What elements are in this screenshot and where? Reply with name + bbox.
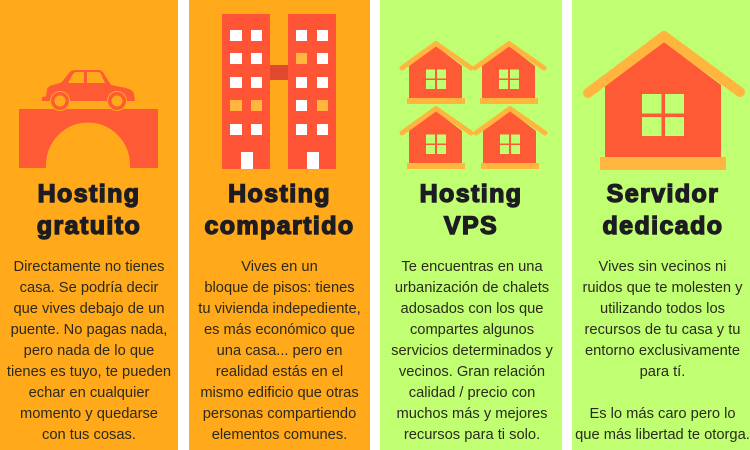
text: hosting VPS description: servicios determinados y	[391, 343, 553, 359]
text: hosting VPS description: recursos para ti solo.	[404, 427, 540, 443]
text: hosting gratuito description: echar en cualquier	[29, 385, 149, 401]
text: servidor dedicado description: recursos de tu casa y tu	[585, 322, 740, 338]
text: hosting compartido description: tu vivienda indepediente,	[198, 301, 361, 317]
text: hosting VPS description: vecinos. Gran relación	[399, 364, 545, 380]
text: hosting gratuito description: tienes es tuyo, te pueden	[7, 364, 171, 380]
icon: two apartment towers	[222, 14, 336, 169]
text: hosting compartido description: es más económico que	[204, 322, 355, 338]
text: servidor dedicado description: para tí.	[640, 364, 685, 380]
text: servidor dedicado description: utilizando todos los	[600, 301, 725, 317]
text: hosting compartido description	[198, 259, 361, 443]
text: hosting VPS description: calidad / precio con	[409, 385, 535, 401]
text: hosting VPS description: Te encuentras en una	[401, 259, 543, 275]
text: hosting compartido description: Vives en un	[241, 259, 318, 275]
heading: servidor dedicado: dedicado	[603, 212, 723, 240]
heading: hosting gratuito: Hosting	[38, 180, 140, 208]
heading: servidor dedicado: Servidor	[607, 180, 719, 208]
icon: four terraced houses	[400, 41, 548, 169]
text: hosting VPS description: compartes algunos	[410, 322, 534, 338]
text: servidor dedicado description: entorno exclusivamente	[585, 343, 740, 359]
heading: hosting VPS: VPS	[444, 212, 498, 240]
panel: servidor dedicado	[572, 0, 750, 450]
panel: hosting VPS	[380, 0, 562, 450]
text: hosting compartido description: personas compartiendo	[203, 406, 356, 422]
heading: hosting gratuito: gratuito	[37, 212, 141, 240]
text: hosting gratuito description: pero nada de lo que	[24, 343, 154, 359]
text: hosting VPS description: muchos más y mejores	[396, 406, 548, 422]
text: hosting gratuito description: que vives debajo de un	[13, 301, 165, 317]
text: hosting compartido description: mismo edificio que otras	[200, 385, 359, 401]
text: hosting gratuito description	[7, 259, 171, 443]
heading: hosting gratuito	[37, 180, 141, 240]
icon: large detached house	[583, 30, 745, 170]
text: servidor dedicado description	[575, 259, 750, 443]
text: servidor dedicado description: ruidos que te molesten y	[582, 280, 743, 296]
text: hosting compartido description: bloque de pisos: tienes	[204, 280, 355, 296]
text: hosting compartido description: una casa... pero en	[217, 343, 342, 359]
text: hosting compartido description: elementos comunes.	[212, 427, 347, 443]
heading: hosting compartido: Hosting	[228, 180, 331, 208]
text: servidor dedicado description: Vives sin vecinos ni	[599, 259, 726, 275]
heading: hosting compartido	[204, 180, 355, 240]
text: hosting gratuito description: puente. No pagas nada,	[11, 322, 167, 338]
text: hosting compartido description: realidad estás en el	[216, 364, 343, 380]
icon: car on bridge	[19, 70, 158, 168]
text: hosting VPS description: adosados con los que	[401, 301, 543, 317]
panel: hosting gratuito	[0, 0, 178, 450]
text: servidor dedicado description: Es lo más caro pero lo	[589, 406, 736, 422]
text: hosting VPS description: urbanización de chalets	[395, 280, 549, 296]
text: hosting gratuito description: Directamente no tienes	[13, 259, 165, 275]
text: hosting VPS description	[391, 259, 553, 443]
text: servidor dedicado description: que más libertad te otorga.	[575, 427, 750, 443]
heading: hosting compartido: compartido	[204, 212, 355, 240]
heading: hosting VPS: Hosting	[420, 180, 522, 208]
text: hosting gratuito description: momento y quedarse	[20, 406, 158, 422]
panel: hosting compartido	[189, 0, 370, 450]
heading: servidor dedicado	[602, 180, 723, 240]
text: hosting gratuito description: con tus cosas.	[42, 427, 136, 443]
text: hosting gratuito description: casa. Se podría decir	[20, 280, 158, 296]
heading: hosting VPS	[420, 180, 522, 240]
